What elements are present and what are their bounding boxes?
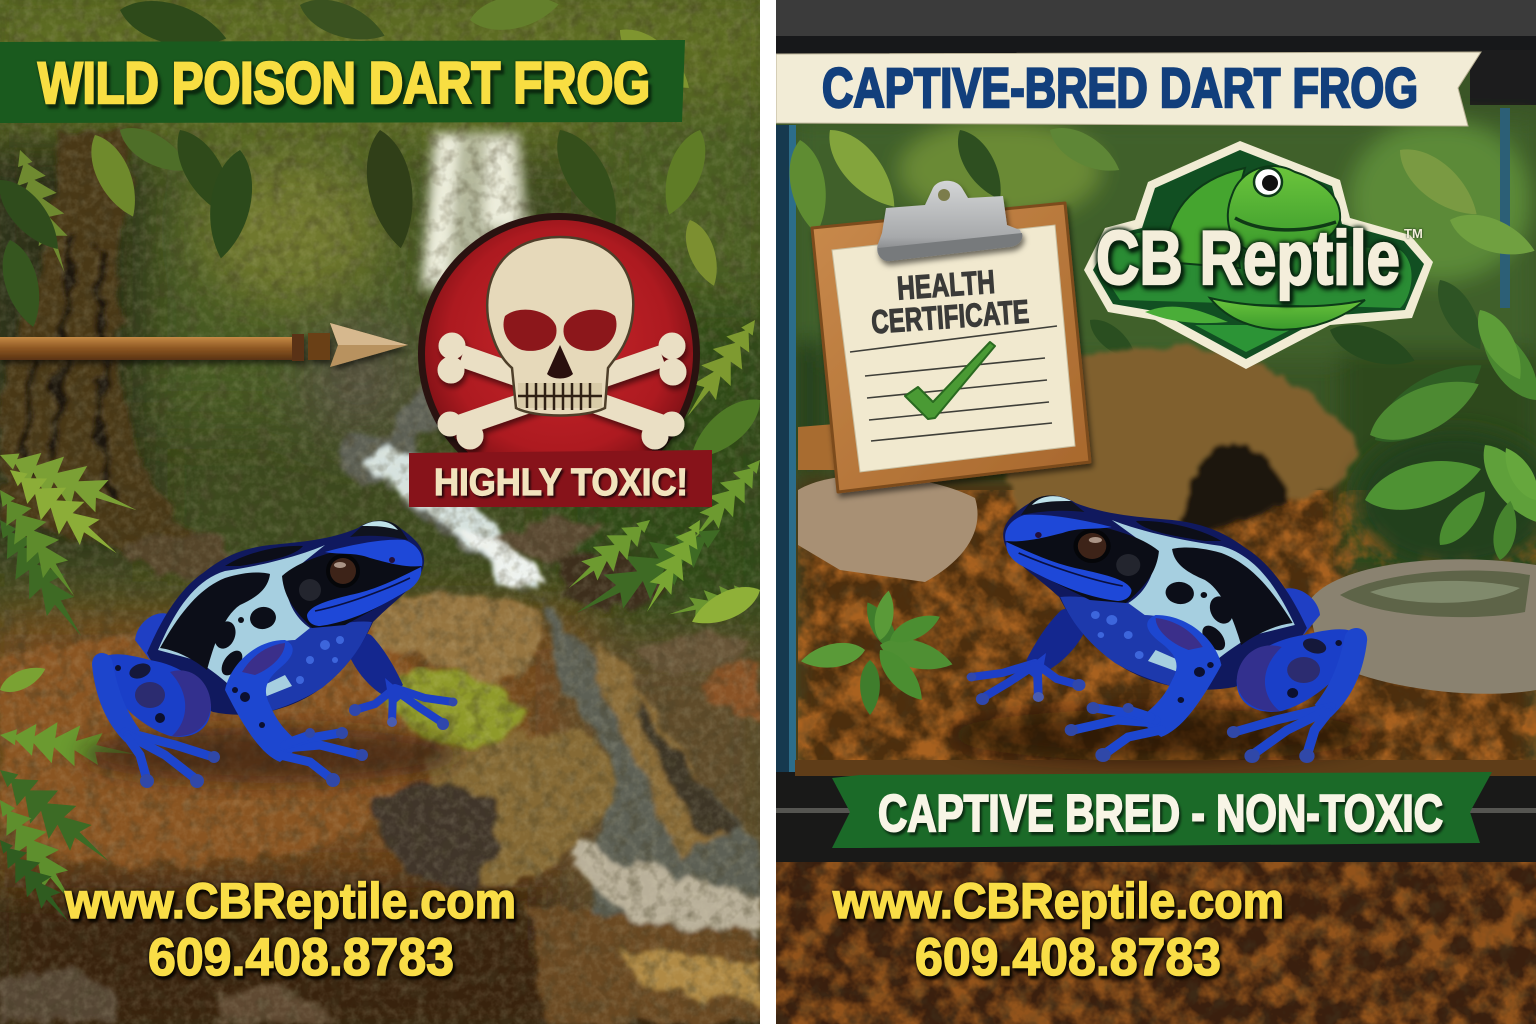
rocks: [0, 520, 760, 1024]
soil: [776, 858, 1536, 1024]
title text: WILD POISON DART FROG: [38, 51, 650, 116]
grain texture: [0, 0, 760, 1024]
certificate heading: HEALTH: [896, 263, 996, 307]
back foliage: [783, 118, 1536, 376]
lizard: [1165, 168, 1245, 268]
highly toxic label: HIGHLY TOXIC!: [434, 462, 688, 504]
website and phone captive: www.CBReptile.com: [832, 873, 1284, 929]
captive bred non-toxic banner: [832, 772, 1492, 848]
panel: wild poison dart frog: [0, 0, 780, 1024]
certificate heading: [872, 270, 1030, 334]
icon: check mark: [905, 342, 995, 419]
title banner: [0, 40, 685, 123]
right green plant: [1355, 303, 1536, 570]
blue dart frog wild: [80, 520, 460, 788]
highly toxic label: [409, 450, 712, 507]
dark lower bar: [776, 772, 1536, 862]
CB Reptile logo: [1084, 141, 1433, 369]
blue dart frog captive: [950, 496, 1370, 763]
substrate texture: [798, 490, 1536, 775]
website and phone captive: [832, 873, 1284, 987]
small left plant: [799, 589, 956, 715]
clip: [877, 181, 1022, 261]
tree trunk: [0, 130, 205, 564]
terrarium scene: [776, 0, 1536, 1024]
jungle and stream scene: [0, 0, 780, 1024]
website and phone: www.CBReptile.com: [64, 873, 516, 929]
rock cave: [1009, 347, 1358, 530]
icon: skull and crossbones badge: [418, 213, 700, 452]
logo wordmark: CB Reptile: [1096, 216, 1400, 301]
foliage left panel: [0, 0, 772, 932]
stone left: [798, 475, 978, 582]
trademark: TM: [1404, 226, 1423, 241]
crossbones: [438, 333, 686, 449]
captive title banner: [776, 52, 1481, 126]
icon: poison dart arrow: [0, 323, 408, 367]
water dish: [1310, 559, 1536, 694]
clipboard health certificate: [798, 181, 1090, 492]
certificate heading: CERTIFICATE: [870, 293, 1030, 340]
website and phone: 609.408.8783: [148, 928, 454, 987]
website and phone captive: 609.408.8783: [915, 928, 1221, 987]
website and phone: [64, 873, 516, 987]
panel: captive-bred dart frog: [776, 0, 1536, 1024]
moss patch: [385, 670, 528, 748]
skull: [487, 237, 633, 416]
